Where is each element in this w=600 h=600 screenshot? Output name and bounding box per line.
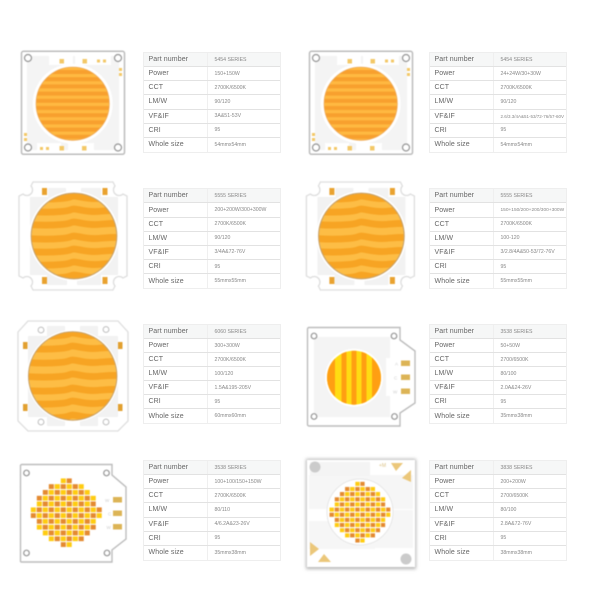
spec table: 3538 series 50+50W: Part number <box>434 328 474 335</box>
spec table: 5555 series right <box>428 188 567 289</box>
chip: 6060 series octagonal <box>18 321 128 431</box>
spec table: 3538 series 100+100W: 80/110 <box>214 507 230 513</box>
spec table: 5454 series right <box>428 52 567 153</box>
spec table: 3838 series: VF&IF <box>434 521 455 528</box>
spec table: 3538 series 50+50W <box>428 324 567 424</box>
chip: 3538 series 50+50W striped: C <box>394 376 398 380</box>
chip: 3838 series 200+200W square: +M <box>379 463 386 469</box>
spec table: 3838 series: Part number <box>434 464 474 471</box>
spec table: 5454 series right: 2700K/6500K <box>500 85 532 91</box>
spec table: 5555 series left: 3/4A&72-76V <box>214 249 245 255</box>
spec table: 3838 series: 2700/6500K <box>500 493 528 499</box>
spec table: 5454 series right: 54mmx54mm <box>500 142 532 148</box>
spec table: 3538 series 100+100W: LM/W <box>148 506 167 513</box>
spec table: 5454 series left: CCT <box>148 84 163 91</box>
spec table: 6060 series: 60mmx60mm <box>214 413 246 419</box>
spec table: 5555 series left: 2700K/6500K <box>214 221 246 227</box>
chip: 5454 series 24+24W <box>310 51 412 154</box>
spec table: 6060 series: 100/120 <box>214 371 233 377</box>
spec table: 5454 series left: 90/120 <box>214 99 230 105</box>
spec table: 5454 series left <box>142 52 281 153</box>
spec table: 3538 series 100+100W: CRI <box>148 535 161 542</box>
spec table: 6060 series: 95 <box>214 399 220 405</box>
spec table: 3538 series 50+50W: 50+50W <box>500 343 520 349</box>
spec table: 3538 series 50+50W: CRI <box>434 398 447 405</box>
spec table: 5454 series left: 95 <box>214 127 220 133</box>
spec table: 3838 series: Power <box>434 478 455 485</box>
spec table: 6060 series: 2700K/6500K <box>214 357 246 363</box>
chip: 5454 series 150+150W <box>22 51 124 154</box>
spec table: 6060 series: Whole size <box>148 413 184 420</box>
spec table: 5555 series right: VF&IF <box>434 249 455 256</box>
spec table: 5555 series right: 2700K/6500K <box>500 221 532 227</box>
spec table: 5555 series right: 55mmx55mm <box>500 278 532 284</box>
spec table: 5555 series right: 150+150/200+200/300+300W <box>500 208 564 212</box>
spec table: 3538 series 100+100W: Part number <box>148 464 188 471</box>
spec table: 5555 series left: 95 <box>214 264 220 270</box>
spec table: 3538 series 100+100W: 100+100/150+150W <box>214 479 262 485</box>
spec table: 5555 series right: CRI <box>434 263 447 270</box>
spec table: 5454 series left: Power <box>148 70 169 77</box>
spec table: 5555 series right: 100-120 <box>500 235 520 241</box>
spec table: 5555 series left: Power <box>148 206 169 214</box>
chip: 3538 series 100+100W LED matrix <box>20 464 126 562</box>
spec table: 5555 series left: VF&IF <box>148 249 169 256</box>
spec table: 3538 series 50+50W: CCT <box>434 356 449 363</box>
spec table: 6060 series: 6060 SERIES <box>214 329 247 335</box>
spec table: 5555 series left: Whole size <box>148 278 184 285</box>
spec table: 5555 series right: 95 <box>500 264 506 270</box>
spec table: 5555 series right: 3/2.8/4A&50-53/72-76V <box>500 249 555 255</box>
spec table: 3838 series: 3838 SERIES <box>500 465 533 471</box>
LED cell matrix <box>31 478 102 547</box>
spec table: 3538 series 100+100W: 3538 SERIES <box>214 465 247 471</box>
spec table: 3538 series 100+100W: 4/6.2A&23-26V <box>214 521 250 527</box>
LED disc with vertical stripes <box>326 350 382 406</box>
spec table: 3538 series 100+100W: CCT <box>148 492 163 499</box>
chip: 3538 series 100+100W LED matrix: W <box>106 525 112 530</box>
spec table: 5454 series right: Whole size <box>434 141 470 148</box>
spec table: 5555 series left: 5555 SERIES <box>214 193 247 199</box>
spec table: 3538 series 100+100W: 2700K/6500K <box>214 493 246 499</box>
spec table: 3538 series 100+100W: 95 <box>214 535 220 541</box>
spec table: 3538 series 50+50W: 2.0A&24-26V <box>500 385 531 391</box>
spec table: 6060 series: Power <box>148 342 169 349</box>
spec table: 3538 series 100+100W: 35mmx38mm <box>214 550 246 556</box>
spec table: 3538 series 50+50W: Power <box>434 342 455 349</box>
spec table: 3538 series 50+50W: LM/W <box>434 370 453 377</box>
spec table: 5454 series right: Power <box>434 70 455 77</box>
spec table: 5454 series right: VF&IF <box>434 113 455 120</box>
spec table: 6060 series: 300+300W <box>214 343 240 349</box>
spec table: 5454 series left: 2700K/6500K <box>214 85 246 91</box>
spec table: 3538 series 50+50W: 3538 SERIES <box>500 329 533 335</box>
spec table: 5454 series right: 24+24W/30+30W <box>500 71 541 77</box>
spec table: 3538 series 100+100W: Whole size <box>148 549 184 556</box>
spec table: 5555 series right: 5555 SERIES <box>500 193 533 199</box>
spec table: 5454 series right: 5454 SERIES <box>500 57 533 63</box>
spec table: 5454 series left: CRI <box>148 127 161 134</box>
spec table: 6060 series: VF&IF <box>148 384 169 391</box>
spec table: 5454 series right: 95 <box>500 127 506 133</box>
spec table: 5454 series left: 5454 SERIES <box>214 57 247 63</box>
spec table: 3838 series: 200+200W <box>500 479 526 485</box>
spec table: 5555 series right: Whole size <box>434 278 470 285</box>
chip: 3538 series 50+50W striped: W <box>393 390 398 394</box>
chip: 5555 series 150+150W <box>306 182 414 290</box>
spec table: 3838 series: CRI <box>434 535 447 542</box>
spec table: 5555 series left <box>142 188 281 289</box>
chip: 3538 series 50+50W striped: A <box>395 362 398 366</box>
spec table: 3538 series 100+100W <box>142 460 281 561</box>
spec table: 5454 series right: 90/120 <box>500 99 516 105</box>
spec table: 3838 series: LM/W <box>434 506 453 513</box>
spec table: 5454 series left: 150+150W <box>214 71 240 77</box>
spec table: 5454 series right: 2.6/3.3/4A&51-53/72-76/57-60V <box>500 114 564 119</box>
spec table: 5454 series left: Part number <box>148 56 188 63</box>
spec table: 6060 series: LM/W <box>148 370 167 377</box>
spec table: 5454 series right: CRI <box>434 127 447 134</box>
spec table: 5555 series right: Part number <box>434 192 474 199</box>
spec table: 5454 series left: LM/W <box>148 98 167 105</box>
spec table: 3538 series 50+50W: 95 <box>500 399 506 405</box>
spec table: 5555 series right: CCT <box>434 221 449 228</box>
chip: 3538 series 100+100W LED matrix: C <box>108 512 112 516</box>
spec table: 3538 series 50+50W: Whole size <box>434 413 470 420</box>
chip: 3538 series 100+100W LED matrix: W <box>105 498 110 503</box>
spec table: 5454 series left: 3A&51-53V <box>214 113 241 119</box>
spec table: 3838 series: 38mmx38mm <box>500 550 532 556</box>
spec table: 6060 series: CCT <box>148 356 163 363</box>
spec table: 6060 series <box>142 324 281 424</box>
spec table: 3838 series <box>428 460 567 561</box>
LED cell matrix <box>330 482 390 543</box>
spec table: 5555 series left: CCT <box>148 221 163 228</box>
spec table: 5454 series right: LM/W <box>434 98 453 105</box>
spec table: 3538 series 50+50W: VF&IF <box>434 384 455 391</box>
spec table: 5555 series right: Power <box>434 206 455 214</box>
spec table: 5555 series left: 55mmx55mm <box>214 278 246 284</box>
spec table: 3538 series 100+100W: Power <box>148 478 169 485</box>
spec table: 6060 series: Part number <box>148 328 188 335</box>
spec table: 3838 series: 80/100 <box>500 507 516 513</box>
spec table: 3838 series: 95 <box>500 535 506 541</box>
spec table: 5555 series left: LM/W <box>148 235 167 242</box>
spec table: 3838 series: 2.8A&72-76V <box>500 521 531 527</box>
spec table: 5555 series left: 200+200W/300+300W <box>214 207 266 213</box>
spec table: 5454 series left: 54mmx54mm <box>214 142 246 148</box>
spec table: 5555 series left: 90/120 <box>214 235 230 241</box>
spec table: 3838 series: CCT <box>434 492 449 499</box>
spec table: 5454 series left: Whole size <box>148 141 184 148</box>
spec table: 5454 series right: CCT <box>434 84 449 91</box>
spec table: 6060 series: 1.5A&195-205V <box>214 385 251 391</box>
spec table: 6060 series: CRI <box>148 398 161 405</box>
spec table: 5454 series right: Part number <box>434 56 474 63</box>
spec table: 3538 series 50+50W: 80/100 <box>500 371 516 377</box>
spec table: 3538 series 100+100W: VF&IF <box>148 521 169 528</box>
spec table: 5555 series right: LM/W <box>434 235 453 242</box>
spec table: 5454 series left: VF&IF <box>148 113 169 120</box>
spec table: 3538 series 50+50W: 35mmx38mm <box>500 413 532 419</box>
spec table: 3538 series 50+50W: 2700/6500K <box>500 357 528 363</box>
spec table: 3838 series: Whole size <box>434 549 470 556</box>
spec table: 5555 series left: CRI <box>148 263 161 270</box>
chip: 3838 series 200+200W square <box>306 459 416 569</box>
spec table: 5555 series left: Part number <box>148 192 188 199</box>
chip: 3538 series 50+50W striped <box>308 328 415 426</box>
chip: 5555 series 200+200W <box>19 182 127 290</box>
LED disc with wavy stripes <box>21 332 125 420</box>
